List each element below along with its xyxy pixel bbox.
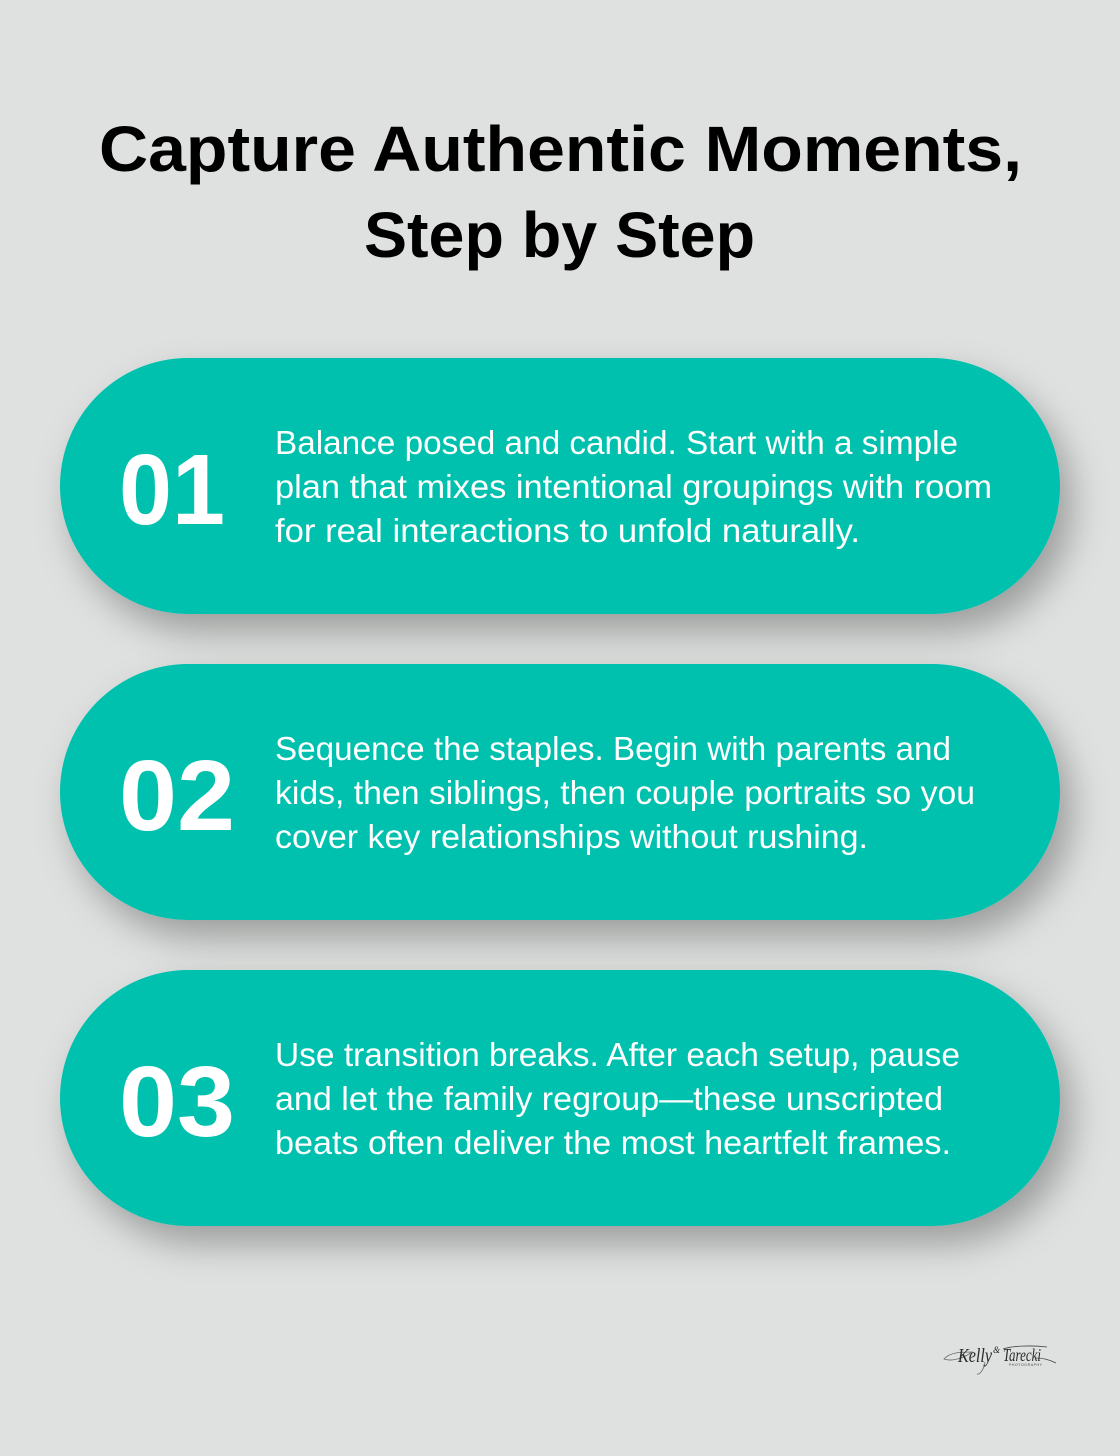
panel: step 03	[60, 970, 1060, 1226]
title: Capture Authentic Moments,	[99, 113, 1022, 185]
text block 03: and let the family regroup—these unscripted	[275, 1080, 943, 1117]
logo: signature: &	[993, 1345, 1000, 1355]
logo: signature: Tarecki	[1003, 1345, 1041, 1365]
logo: signature	[944, 1345, 1056, 1374]
number 01: 01	[119, 434, 225, 546]
text block 02: cover key relationships without rushing.	[275, 818, 868, 855]
pill background 02	[60, 664, 1060, 920]
text block 03	[275, 1036, 960, 1161]
number 03: 03	[119, 1046, 235, 1158]
text block 02: Sequence the staples. Begin with parents and	[275, 730, 951, 767]
title: Step by Step	[364, 199, 755, 271]
text block 02: kids, then siblings, then couple portraits so you	[275, 774, 975, 811]
text block 03: beats often deliver the most heartfelt frames.	[275, 1124, 951, 1161]
panel: step 01	[60, 358, 1060, 614]
panel: step 02	[60, 664, 1060, 920]
title	[99, 113, 1022, 271]
logo: signature: Kelly	[957, 1345, 992, 1367]
text block 01: plan that mixes intentional groupings with room	[275, 468, 992, 505]
pill background 03	[60, 970, 1060, 1226]
pill background 01	[60, 358, 1060, 614]
text block 01: Balance posed and candid. Start with a simple	[275, 424, 958, 461]
number 02: 02	[119, 740, 235, 852]
logo: signature: PHOTOGRAPHY	[1009, 1363, 1043, 1367]
text block 02	[275, 730, 975, 855]
text block 03: Use transition breaks. After each setup, pause	[275, 1036, 960, 1073]
text block 01: for real interactions to unfold naturally.	[275, 512, 860, 549]
text block 01	[275, 424, 992, 549]
